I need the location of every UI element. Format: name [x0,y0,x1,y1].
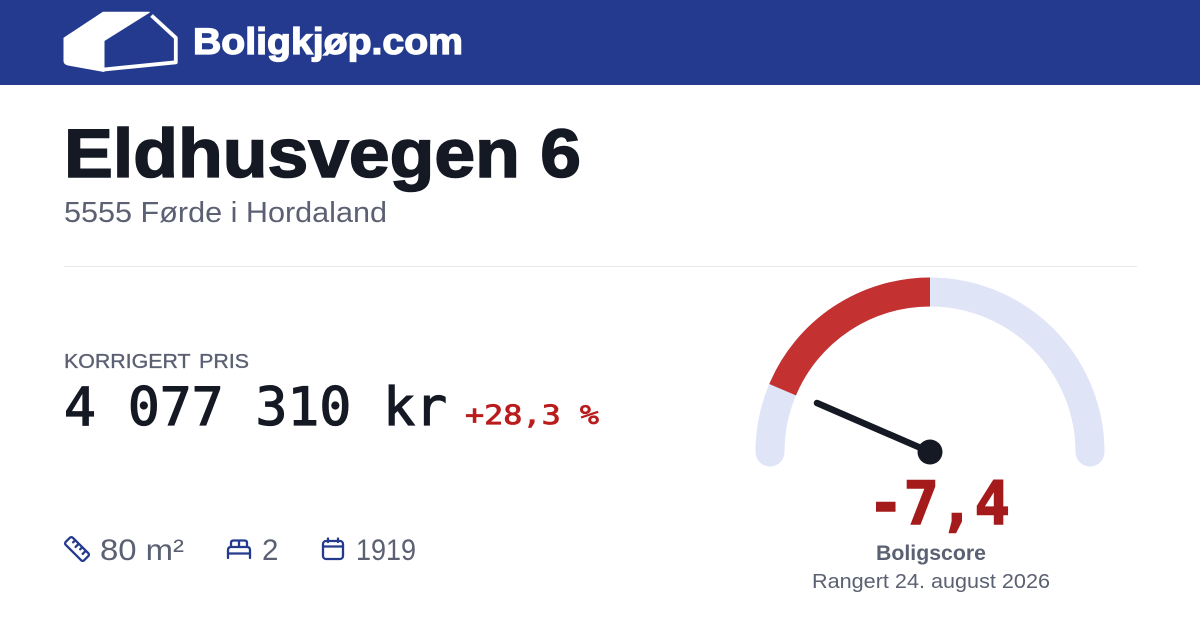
icon: ruler [64,536,90,562]
gauge [770,292,1090,464]
gauge needle [817,403,942,464]
facts row [64,534,416,567]
price value: 4 077 310 kr [64,377,447,438]
area text: 80 m² [100,534,184,567]
bedrooms text: 2 [262,534,278,567]
score label: Boligscore [876,541,986,565]
icon: calendar [323,538,343,559]
gauge value arc [783,292,930,390]
subtitle address: 5555 Førde i Hordaland [64,197,387,229]
year text: 1919 [356,534,416,567]
title: Eldhusvegen 6 [64,115,581,192]
logo wordmark: Boligkjøp.com [193,21,463,62]
price change: +28,3 % [465,400,599,431]
gauge track [770,292,1090,452]
price label: KORRIGERT PRIS [64,350,249,373]
header bar [0,0,1200,85]
ranking date: Rangert 24. august 2026 [812,570,1050,593]
score value: -7,4 [868,469,1010,539]
logo icon: house [64,12,176,72]
icon: bed [228,540,250,558]
